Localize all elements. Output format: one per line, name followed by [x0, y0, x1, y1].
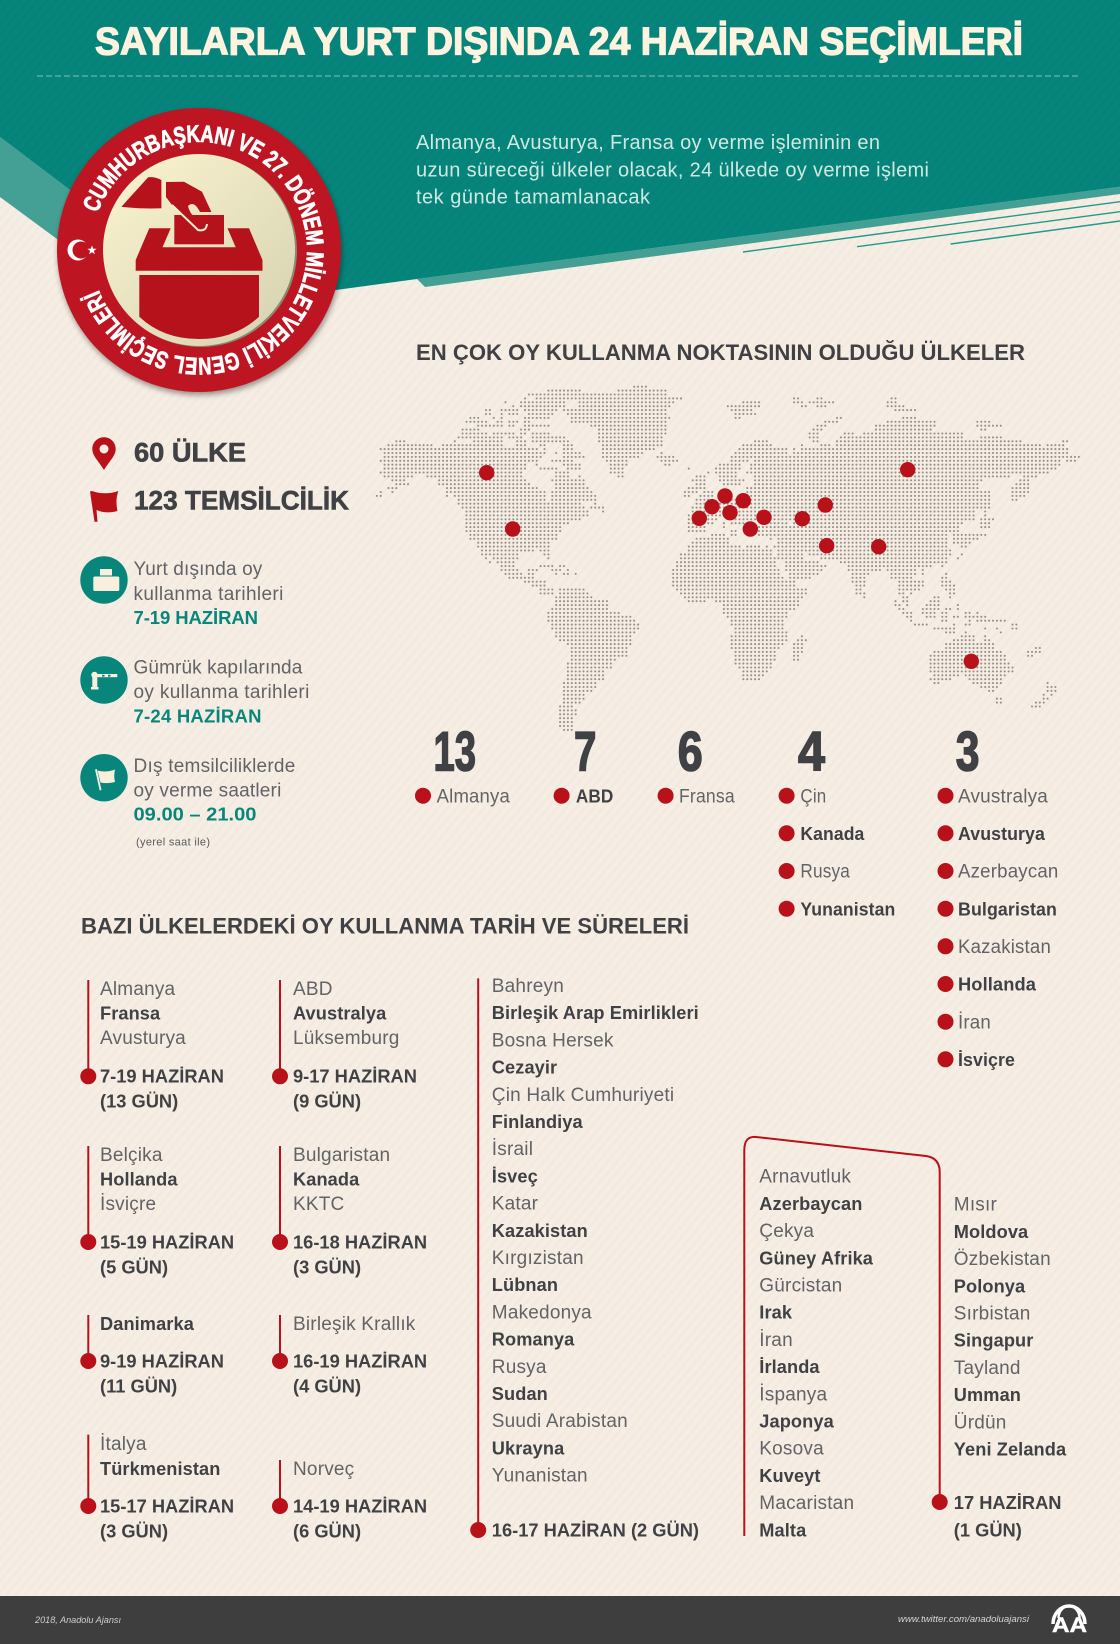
schedule: 17 Haziran: Umman	[954, 1385, 1021, 1405]
map markers	[479, 462, 979, 669]
top countries: 3: 3	[956, 720, 980, 783]
top countries: 3: Avustralya	[958, 786, 1048, 807]
schedule: 17 Haziran: Kosova	[759, 1439, 824, 1460]
intro text: uzun süreceği ülkeler olacak, 24 ülkede oy verme işlemi	[416, 159, 929, 181]
schedule: 16-18 Haziran: Bulgaristan	[293, 1145, 390, 1166]
schedule: 16-17 Haziran: Suudi Arabistan	[492, 1411, 628, 1432]
schedule: 15-17 Haziran: (3 GÜN)	[100, 1521, 168, 1542]
schedule: 17 Haziran: Arnavutluk	[759, 1167, 851, 1188]
schedule: 16-17 Haziran: Lübnan	[492, 1275, 558, 1295]
top countries: 6: Fransa	[679, 786, 735, 807]
schedule: 17 Haziran: Yeni Zelanda	[954, 1440, 1067, 1460]
top countries: 3: Hollanda	[958, 975, 1037, 995]
schedule: 16-17 Haziran: Çin Halk Cumhuriyeti	[492, 1085, 674, 1106]
top countries: 3: Avusturya	[958, 824, 1046, 844]
icon: ballot box	[121, 177, 263, 339]
stats: 60 countries: 60 ÜLKE	[134, 438, 246, 468]
schedule: 16-17 Haziran: Kazakistan	[492, 1221, 588, 1241]
schedule: 17 Haziran: Tayland	[954, 1358, 1021, 1379]
schedule: 16-17 Haziran: İsrail	[492, 1139, 533, 1160]
schedule: 14-19 Haziran: 14-19 HAZİRAN	[293, 1496, 427, 1517]
footer: 2018, Anadolu Ajansı	[34, 1615, 121, 1626]
top countries: 7: ABD	[576, 786, 613, 806]
schedule: 17 Haziran: Moldova	[954, 1222, 1029, 1242]
schedule: 7-19 Haziran: Fransa	[100, 1003, 161, 1023]
schedule: 15-19 Haziran: (5 GÜN)	[100, 1256, 168, 1277]
top countries: 3: Kazakistan	[958, 937, 1051, 958]
schedule: 9-17 Haziran: ABD	[293, 979, 333, 1000]
schedule: 9-19 Haziran: Danimarka	[100, 1314, 195, 1334]
schedule: 15-17 Haziran: İtalya	[100, 1434, 147, 1455]
schedule: 16-19 Haziran: (4 GÜN)	[293, 1376, 361, 1397]
top countries: 4: Rusya	[800, 862, 850, 883]
top countries: 3: İran	[958, 1012, 991, 1033]
schedule: 16-17 Haziran: İsveç	[492, 1166, 538, 1186]
schedule: 16-19 Haziran	[272, 1314, 427, 1397]
icon: crescent and star	[68, 240, 97, 260]
schedule: 16-17 Haziran: Bahreyn	[492, 976, 564, 997]
top countries: 3	[938, 720, 1058, 1070]
schedule: 16-17 Haziran: Makedonya	[492, 1302, 592, 1323]
top countries: 13: Almanya	[437, 786, 510, 807]
schedule: 16-19 Haziran: Birleşik Krallık	[293, 1314, 416, 1335]
info: abroad voting dates: kullanma tarihleri	[134, 584, 284, 605]
top countries: 3: Azerbaycan	[958, 862, 1058, 883]
schedule: 17 Haziran: Irak	[759, 1303, 793, 1323]
info: abroad voting dates	[80, 556, 284, 628]
top countries: 4: 4	[798, 720, 825, 783]
top countries: 6: 6	[678, 720, 703, 783]
info: mission voting hours	[80, 754, 296, 848]
schedule: 16-18 Haziran: (3 GÜN)	[293, 1256, 361, 1277]
schedule: 17 Haziran: Polonya	[954, 1276, 1026, 1296]
top countries: 13	[415, 720, 510, 807]
schedule: 16-17 Haziran: Birleşik Arap Emirlikleri	[492, 1003, 699, 1023]
schedule: 16-17 Haziran: Ukrayna	[492, 1438, 565, 1458]
schedule: 17 Haziran: 17 HAZİRAN	[954, 1492, 1061, 1513]
info: customs voting dates: Gümrük kapılarında	[134, 657, 303, 678]
schedule: 15-17 Haziran	[80, 1434, 234, 1542]
title: SAYILARLA YURT DIŞINDA 24 HAZİRAN SEÇİMLERİ	[95, 20, 1023, 64]
icon: ballot box	[93, 569, 119, 591]
schedule: 17 Haziran: Ürdün	[954, 1412, 1007, 1433]
info: mission voting hours: oy verme saatleri	[134, 781, 282, 802]
top countries: 3: Bulgaristan	[958, 899, 1057, 919]
top countries: 6	[658, 720, 735, 807]
schedule: 15-19 Haziran: İsviçre	[100, 1194, 156, 1215]
schedule: 15-17 Haziran: 15-17 HAZİRAN	[100, 1496, 234, 1517]
intro text: Almanya, Avusturya, Fransa oy verme işleminin en	[416, 132, 880, 154]
schedule: 17 Haziran: Güney Afrika	[759, 1248, 874, 1268]
schedule: 16-19 Haziran: 16-19 HAZİRAN	[293, 1351, 427, 1372]
schedule: 7-19 Haziran	[80, 979, 224, 1112]
schedule: 15-19 Haziran: 15-19 HAZİRAN	[100, 1231, 234, 1252]
info: customs voting dates: oy kullanma tarihleri	[134, 682, 310, 703]
schedule: 17 Haziran: Azerbaycan	[759, 1194, 862, 1214]
schedule: 9-17 Haziran: Lüksemburg	[293, 1028, 400, 1049]
schedule: 9-19 Haziran: (11 GÜN)	[100, 1376, 177, 1397]
schedule: 9-17 Haziran: (9 GÜN)	[293, 1091, 361, 1112]
schedule: 9-19 Haziran: 9-19 HAZİRAN	[100, 1351, 224, 1372]
schedule: 16-17 Haziran: Yunanistan	[492, 1466, 588, 1487]
intro text	[416, 132, 929, 209]
stats: 123 missions	[90, 485, 349, 522]
schedule: 7-19 Haziran: 7-19 HAZİRAN	[100, 1066, 224, 1087]
intro text: tek günde tamamlanacak	[416, 187, 651, 209]
top countries: 7: 7	[574, 720, 596, 783]
schedule: 17 Haziran: İspanya	[759, 1384, 827, 1405]
schedule: 14-19 Haziran: Norveç	[293, 1459, 354, 1480]
schedule: 16-17 Haziran: Romanya	[492, 1330, 575, 1350]
schedule: 17 Haziran: (1 GÜN)	[954, 1519, 1022, 1540]
schedule: 17 Haziran: Macaristan	[759, 1493, 854, 1514]
schedule: 7-19 Haziran: (13 GÜN)	[100, 1091, 178, 1112]
schedule: 16-17 Haziran: Finlandiya	[492, 1112, 584, 1132]
info: mission voting hours: (yerel saat ile)	[136, 836, 210, 848]
schedule: 15-17 Haziran: Türkmenistan	[100, 1459, 220, 1479]
footer	[0, 1596, 1120, 1644]
heading: countries with most polling points: EN ÇOK OY KULLANMA NOKTASININ OLDUĞU ÜLKELER	[416, 340, 1025, 365]
schedule: 17 Haziran: İrlanda	[759, 1357, 820, 1377]
top countries: 4: Çin	[800, 786, 826, 807]
heading: dates and durations: BAZI ÜLKELERDEKİ OY KULLANMA TARİH VE SÜRELERİ	[81, 913, 689, 938]
schedule: 16-18 Haziran	[272, 1145, 427, 1277]
schedule: 7-19 Haziran: Avusturya	[100, 1028, 186, 1049]
schedule: 17 Haziran: Japonya	[759, 1412, 835, 1432]
schedule: 17 Haziran	[744, 1137, 1067, 1540]
schedule: 7-19 Haziran: Almanya	[100, 979, 176, 1000]
schedule: 17 Haziran: Singapur	[954, 1331, 1033, 1351]
info: customs voting dates: 7-24 HAZİRAN	[134, 705, 262, 726]
schedule: 16-17 Haziran: Katar	[492, 1194, 539, 1215]
schedule: 9-19 Haziran	[80, 1314, 224, 1397]
schedule: 9-17 Haziran	[272, 979, 417, 1112]
schedule: 16-17 Haziran: Kırgızistan	[492, 1248, 584, 1269]
schedule: 16-17 Haziran	[470, 976, 699, 1540]
schedule: 17 Haziran: İran	[759, 1330, 793, 1351]
stats: 123 missions: 123 TEMSİLCİLİK	[134, 485, 349, 515]
schedule: 15-19 Haziran	[80, 1145, 234, 1277]
logo: AA: AA	[1052, 1614, 1087, 1637]
schedule: 17 Haziran: Özbekistan	[954, 1249, 1051, 1270]
schedule: 17 Haziran: Malta	[759, 1520, 807, 1540]
dotted world map	[377, 387, 1079, 730]
schedule: 9-17 Haziran: Avustralya	[293, 1003, 387, 1023]
schedule: 16-17 Haziran: Rusya	[492, 1357, 547, 1378]
schedule: 16-17 Haziran: Cezayir	[492, 1058, 557, 1078]
schedule: 14-19 Haziran: (6 GÜN)	[293, 1521, 361, 1542]
top countries: 13: 13	[434, 720, 476, 783]
schedule: 9-17 Haziran: 9-17 HAZİRAN	[293, 1066, 417, 1087]
top countries: 4: Yunanistan	[800, 899, 895, 919]
footer: www.twitter.com/anadoluajansi	[898, 1614, 1030, 1625]
stats: 60 countries	[92, 437, 246, 470]
schedule: 16-18 Haziran: KKTC	[293, 1194, 344, 1215]
top countries: 4: Kanada	[800, 824, 865, 844]
info: abroad voting dates: Yurt dışında oy	[134, 559, 263, 580]
badge ring text: CUMHURBAŞKANI VE 27. DÖNEM MİLLETVEKİLİ GENEL SEÇİMLERİ	[80, 124, 326, 375]
schedule: 14-19 Haziran	[272, 1459, 427, 1542]
schedule: 17 Haziran: Gürcistan	[759, 1276, 842, 1296]
schedule: 16-18 Haziran: Kanada	[293, 1170, 360, 1190]
top countries: 7	[554, 720, 613, 806]
info: abroad voting dates: 7-19 HAZİRAN	[134, 607, 258, 628]
schedule: 17 Haziran: Sırbistan	[954, 1304, 1031, 1324]
schedule: 16-18 Haziran: 16-18 HAZİRAN	[293, 1231, 427, 1252]
schedule: 15-19 Haziran: Hollanda	[100, 1170, 178, 1190]
header band	[0, 0, 1120, 300]
schedule: 15-19 Haziran: Belçika	[100, 1145, 163, 1166]
schedule: 17 Haziran: Kuveyt	[759, 1466, 821, 1486]
top countries: 3: İsviçre	[958, 1050, 1015, 1070]
info: mission voting hours: 09.00 – 21.00	[134, 804, 256, 825]
schedule: 16-17 Haziran: Sudan	[492, 1384, 548, 1404]
icon: barrier	[91, 672, 117, 690]
info: customs voting dates	[80, 656, 310, 726]
schedule: 17 Haziran: Mısır	[954, 1195, 997, 1216]
info: mission voting hours: Dış temsilciliklerde	[134, 756, 296, 777]
top countries: 4	[779, 720, 895, 919]
schedule: 17 Haziran: Çekya	[759, 1221, 814, 1242]
schedule: 16-17 Haziran: 16-17 HAZİRAN (2 GÜN)	[492, 1519, 699, 1540]
schedule: 16-17 Haziran: Bosna Hersek	[492, 1030, 614, 1051]
icon: flag	[95, 769, 115, 790]
logo: AA	[1052, 1606, 1087, 1637]
badge	[54, 108, 344, 399]
